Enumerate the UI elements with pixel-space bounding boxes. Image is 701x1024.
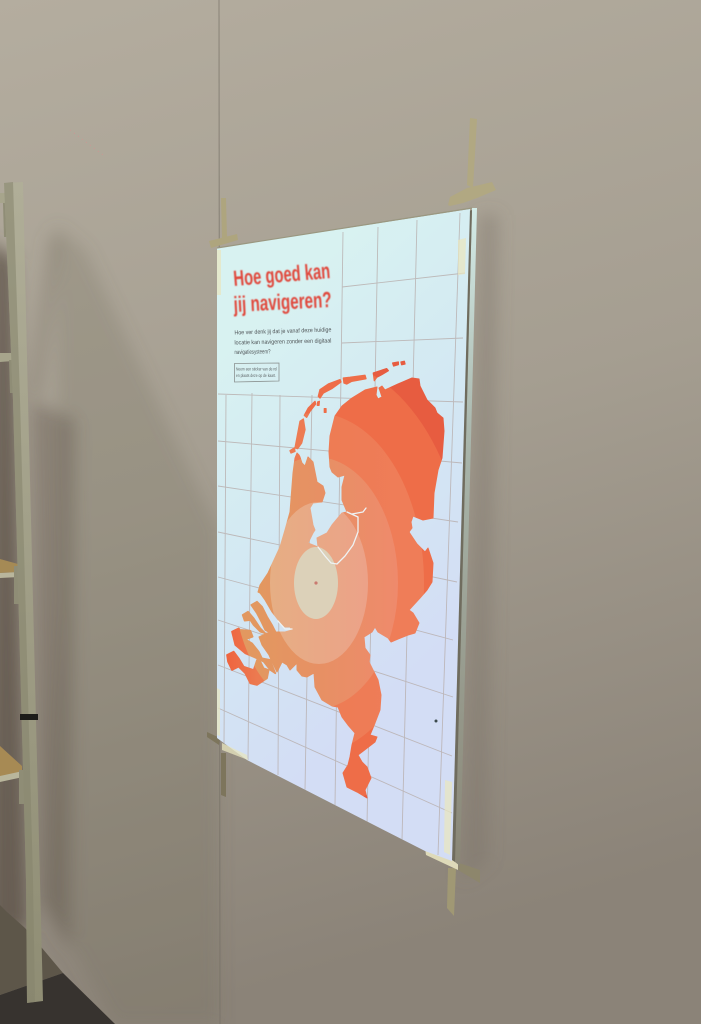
poster frame edge [452,208,477,866]
rack brackets [3,203,25,804]
tape: top right [448,118,496,206]
sticker instruction box: en plaats deze op de kaart. [236,373,276,378]
intro text [234,327,332,356]
zone 2 [234,457,398,709]
map of the Netherlands with distance rings [226,360,444,798]
tape: bottom right [425,848,480,916]
poster [217,208,472,861]
white channels [278,508,366,629]
wall shadows [0,215,498,1024]
poster surface [217,209,470,861]
zone 1 [270,502,368,664]
floor [0,905,115,1024]
wall seam [219,0,220,1024]
tape: top left [209,198,238,248]
centre zone [294,547,338,619]
top edge highlight [217,208,472,248]
title [232,258,332,317]
tape: bottom left [207,732,226,797]
zone 3 [250,414,424,743]
rack post [4,182,43,1003]
laser dots on wall [70,130,103,155]
shelf boards [0,193,23,782]
zone 4 [304,374,442,796]
title: Hoe goed kan [232,258,331,291]
location marker [314,581,318,585]
map grid [218,213,465,855]
sticker instruction box [234,363,279,382]
title: jij navigeren? [232,287,332,317]
shelving rack [0,182,43,1003]
intro text: locatie kan navigeren zonder een digitaal [234,338,332,346]
intro text: Hoe ver denk jij dat je vanaf deze huidige [234,327,332,336]
sticker instruction box: Neem een sticker van de rol [236,366,277,372]
intro text: navigatiesysteem? [234,349,271,356]
outer zone [363,360,444,798]
tape on poster [217,238,466,855]
small dark dot [434,720,438,722]
